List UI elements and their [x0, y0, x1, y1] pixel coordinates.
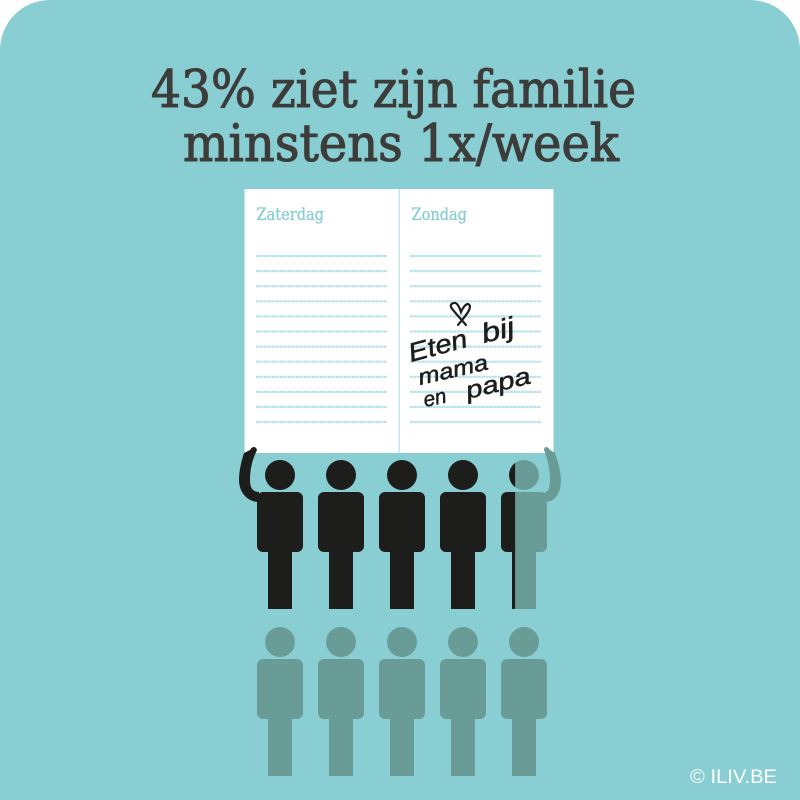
ruled lines: Zaterdag: [256, 256, 387, 422]
handwritten note: en: [421, 385, 449, 412]
row: black people holding agenda: [239, 447, 516, 609]
icon: grey person 5: [501, 627, 547, 776]
icon: person 3: [379, 460, 425, 609]
handwritten note: mama: [416, 350, 490, 390]
title: [151, 61, 636, 174]
icon: person 1: [257, 460, 303, 609]
icon: grey person 4: [440, 627, 486, 776]
icon: grey person 2: [318, 627, 364, 776]
title: 43% ziet zijn familie: [151, 61, 636, 120]
icon: handwritten heart: [451, 303, 470, 325]
handwritten note: bij: [478, 311, 519, 349]
overlay: grey part of person 5: [515, 447, 561, 609]
icon: person 5 black part: [501, 462, 516, 609]
title: minstens 1x/week: [183, 115, 620, 174]
icon: left raised arm: [239, 447, 259, 502]
icon: grey person 3: [379, 627, 425, 776]
panel: open agenda: [244, 189, 554, 453]
icon: person 2: [318, 460, 364, 609]
row: grey people: [257, 627, 547, 776]
icon: grey person 1: [257, 627, 303, 776]
handwritten note: Eten: [405, 323, 471, 368]
copyright credit: © ILIV.BE: [690, 767, 777, 788]
heading: Zondag: Zondag: [412, 205, 467, 225]
handwritten note: [405, 311, 533, 412]
handwritten note: papa: [462, 363, 533, 405]
heading: Zaterdag: Zaterdag: [256, 205, 324, 225]
icon: person 4: [440, 460, 486, 609]
ruled lines: Zondag: [410, 256, 541, 422]
